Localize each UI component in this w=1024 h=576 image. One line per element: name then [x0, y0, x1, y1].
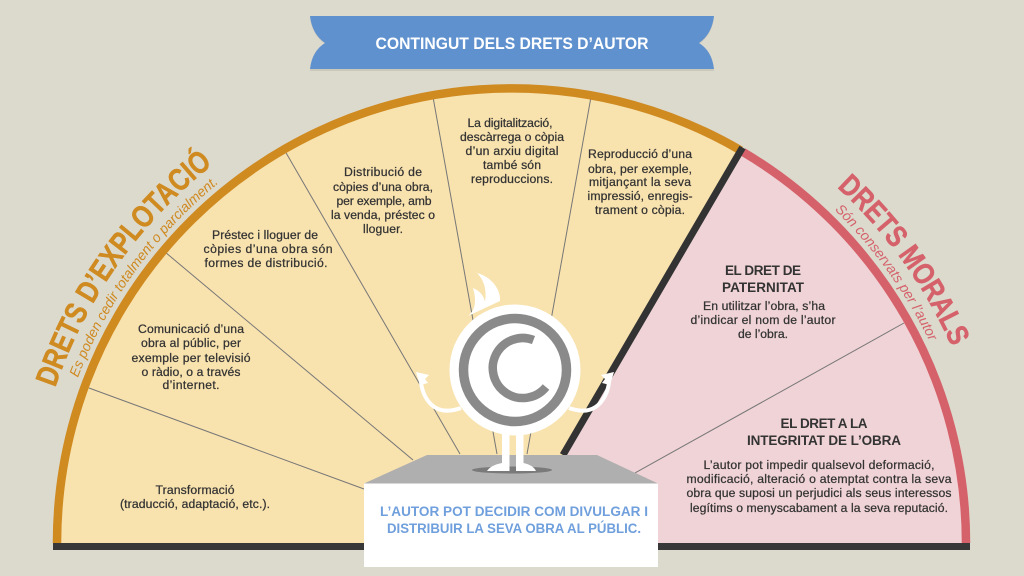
- text: el dret a la integritat: INTEGRITAT DE L’OBRA: [747, 433, 901, 448]
- text: distribució: per exemple, amb: [336, 194, 432, 208]
- orange arc: [57, 88, 741, 543]
- text: transformació: (traducció, adaptació, etc.).: [120, 497, 270, 511]
- subheading: morals: Són conservats per l’autor: [836, 205, 936, 339]
- icon: copyright character: [416, 273, 614, 474]
- text: distribució: la venda, préstec o: [331, 208, 435, 222]
- text: distribució: Distribució de: [344, 165, 422, 179]
- text: préstec: còpies d’una obra són: [204, 242, 332, 256]
- text: préstec: Préstec i lloguer de: [212, 228, 318, 242]
- text: digitalització: d’un arxiu digital: [466, 144, 558, 158]
- text: el dret a la integritat: legítims o menyscabament a la seva reputació.: [690, 501, 948, 515]
- divider: [563, 148, 742, 455]
- text: el dret de paternitat: En utilitzar l’obra, s’ha: [703, 299, 825, 313]
- text: el dret de paternitat: [690, 263, 836, 341]
- text: préstec: formes de distribució.: [204, 256, 328, 270]
- text: comunicació: exemple per televisió: [132, 351, 251, 365]
- text: digitalització: [460, 116, 564, 186]
- text: préstec: [204, 228, 332, 270]
- subheading: explotació: Es poden cedir totalment o parcialment.: [70, 178, 218, 378]
- title text: CONTINGUT DELS DRETS D’AUTOR: [376, 35, 649, 53]
- text: comunicació: o ràdio, o a través: [142, 365, 240, 379]
- text: reproducció: trament o còpia.: [595, 203, 685, 217]
- text: reproducció: [588, 147, 692, 217]
- box text: L’AUTOR POT DECIDIR COM DIVULGAR I: [380, 504, 648, 519]
- heading: drets d'explotació: DRETS D’EXPLOTACIÓ: [35, 146, 209, 386]
- panel: drets morals: [512, 150, 966, 543]
- text: reproducció: obra, per exemple,: [588, 162, 692, 176]
- text: comunicació: Comunicació d’una: [138, 322, 244, 336]
- box text: [380, 504, 648, 536]
- text: transformació: Transformació: [156, 483, 235, 497]
- text: comunicació: [132, 322, 251, 392]
- text: el dret de paternitat: PATERNITAT: [722, 280, 805, 295]
- box text: DISTRIBUIR LA SEVA OBRA AL PÚBLIC.: [387, 521, 641, 536]
- text: reproducció: Reproducció d’una: [588, 147, 692, 161]
- text: distribució: còpies d’una obra,: [333, 180, 433, 194]
- banner: title: [310, 16, 714, 71]
- text: digitalització: reproduccions.: [471, 172, 553, 186]
- text: el dret de paternitat: d’indicar el nom de l’autor: [690, 313, 836, 327]
- base line: [53, 543, 970, 550]
- text: comunicació: obra al públic, per: [141, 336, 241, 350]
- text: comunicació: d’internet.: [162, 378, 220, 392]
- text: el dret a la integritat: obra que suposi un perjudici als seus interessos: [686, 486, 952, 500]
- text: el dret a la integritat: L’autor pot impedir qualsevol deformació,: [704, 458, 934, 472]
- text: reproducció: mitjançant la seva: [589, 175, 691, 189]
- box: ballot box: [364, 455, 658, 567]
- text: digitalització: descàrrega o còpia: [460, 130, 564, 144]
- heading: drets morals: DRETS MORALS: [838, 173, 969, 344]
- text: el dret de paternitat: de l’obra.: [738, 327, 788, 341]
- text: distribució: [331, 165, 435, 236]
- text: el dret a la integritat: modificació, alteració o atemptat contra la seva: [686, 472, 952, 486]
- text: el dret a la integritat: [686, 416, 952, 515]
- text: el dret a la integritat: EL DRET A LA: [780, 416, 868, 431]
- text: transformació: [120, 483, 270, 511]
- text: el dret de paternitat: EL DRET DE: [725, 263, 801, 278]
- text: digitalització: també són: [483, 158, 541, 172]
- text: digitalització: La digitalització,: [468, 116, 552, 130]
- panel: drets d'explotació: [57, 88, 741, 543]
- red arc: [743, 152, 966, 543]
- text: reproducció: impressió, enregis-: [588, 189, 692, 203]
- text: distribució: lloguer.: [363, 222, 403, 236]
